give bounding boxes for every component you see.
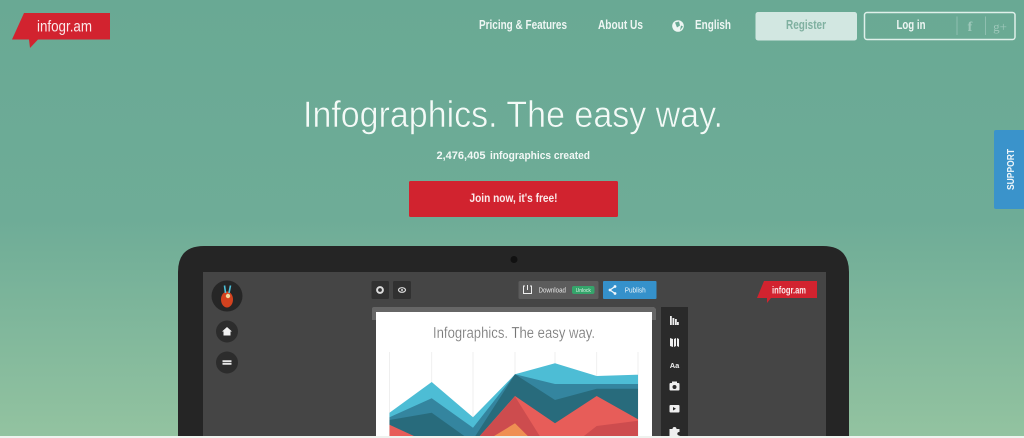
icon: globe bbox=[672, 20, 684, 32]
call to action button: Join now, it's free! bbox=[470, 191, 558, 205]
download button bbox=[518, 281, 598, 299]
icon: preview button bbox=[393, 281, 411, 299]
nav link: About Us: About Us bbox=[598, 18, 643, 32]
logo: small infogr.am: infogr.am bbox=[772, 284, 806, 296]
call to action button bbox=[409, 181, 618, 217]
icon: menu button bbox=[216, 352, 238, 374]
toolbar bbox=[661, 307, 688, 436]
infographic page bbox=[376, 312, 652, 436]
webcam bbox=[510, 256, 518, 263]
logo: infogr.am bbox=[12, 13, 110, 48]
infographic title: Infographics. The easy way. bbox=[433, 325, 595, 342]
app screen bbox=[203, 272, 826, 436]
download button: Unlock bbox=[576, 288, 591, 294]
headline: Infographics. The easy way. bbox=[303, 94, 723, 135]
counter text: 2,476,405 bbox=[436, 150, 486, 162]
support tab bbox=[994, 130, 1024, 209]
nav link: Pricing & Features: Pricing & Features bbox=[479, 18, 567, 32]
mascot avatar bbox=[212, 280, 242, 312]
publish button bbox=[603, 281, 656, 299]
area chart bbox=[390, 352, 638, 436]
bottom edge bbox=[0, 436, 1024, 438]
login button with social icons: Log in bbox=[896, 18, 926, 32]
login button with social icons: g+ bbox=[993, 19, 1007, 34]
icon: settings button bbox=[372, 281, 389, 299]
login button with social icons bbox=[864, 12, 1015, 40]
logo: small infogr.am bbox=[757, 281, 817, 303]
counter text bbox=[436, 150, 590, 162]
icon: video bbox=[670, 405, 680, 412]
icon: map bbox=[670, 338, 679, 347]
logo: infogr.am: infogr.am bbox=[37, 18, 92, 36]
register button: Register bbox=[786, 18, 826, 32]
nav link: English: English bbox=[695, 18, 731, 32]
counter text: infographics created bbox=[490, 150, 590, 162]
register button bbox=[756, 12, 857, 40]
login button with social icons: f bbox=[968, 20, 973, 35]
publish button: Publish bbox=[625, 288, 646, 294]
document frame bbox=[372, 307, 656, 320]
download button: Download bbox=[538, 288, 566, 294]
icon: camera bbox=[670, 382, 680, 390]
icon: puzzle piece bbox=[670, 427, 680, 436]
icon: bar chart bbox=[670, 316, 679, 325]
laptop bbox=[178, 246, 849, 436]
laptop bezel bbox=[178, 246, 849, 436]
text tool label: Aa bbox=[670, 361, 680, 370]
support tab: SUPPORT bbox=[1006, 149, 1017, 190]
icon: home button bbox=[216, 320, 238, 342]
